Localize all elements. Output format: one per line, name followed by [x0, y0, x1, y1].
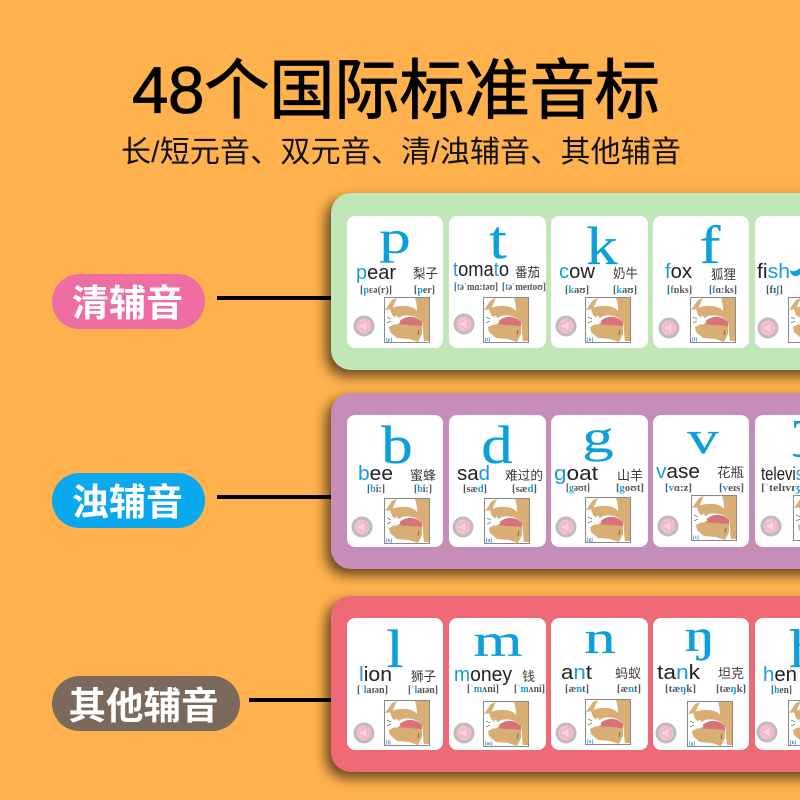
- label: 清辅音: 清辅音: [72, 283, 183, 324]
- card: l: l: [386, 619, 404, 679]
- label: 其他辅音: [52, 676, 240, 731]
- card: l: [ˈlaɪən]: [357, 685, 388, 696]
- card: b: b: [381, 415, 413, 475]
- card: f: 狐狸: [711, 267, 736, 282]
- card: g: 山羊: [617, 468, 643, 483]
- card: d: [d]: [486, 539, 492, 544]
- card: n: n: [584, 613, 616, 663]
- card: d: d: [481, 415, 513, 475]
- label: 浊辅音: [52, 473, 205, 528]
- card: ng: [653, 611, 749, 750]
- card: zh: [755, 398, 800, 547]
- card: t: t: [489, 210, 507, 270]
- card: l: [ˈlaɪən]: [408, 685, 438, 696]
- card: g: goat: [554, 463, 598, 485]
- connector line: voiced: [217, 495, 335, 499]
- card: n: 蚂蚁: [615, 666, 641, 681]
- card: b: [b]: [386, 539, 392, 544]
- card: ng: 坦克: [718, 666, 744, 681]
- card: m: [449, 616, 546, 750]
- card: h: [755, 618, 800, 750]
- card: m: [m]: [485, 742, 493, 747]
- card: t: [449, 210, 546, 348]
- card: f: fox: [665, 261, 692, 283]
- label: 其他辅音: 其他辅音: [68, 685, 218, 727]
- connector line: voiceless: [217, 296, 335, 300]
- card: l: 狮子: [411, 669, 436, 684]
- card: p: p: [379, 213, 411, 263]
- card: h: hen: [763, 664, 797, 686]
- card: ng: ŋ: [684, 611, 716, 661]
- card: b: 蜜蜂: [410, 468, 436, 483]
- card: l: [347, 618, 443, 750]
- card: p: [p]: [386, 338, 392, 343]
- card: ng: [ŋ]: [689, 742, 695, 747]
- card: m: [ˈmʌni]: [514, 684, 545, 695]
- subtitle: 长/短元音、双元音、清/浊辅音、其他辅音: [121, 136, 681, 169]
- card: t: [təˈmeɪtoʊ]: [502, 282, 546, 293]
- card: k: cow: [559, 261, 596, 283]
- card: v: [653, 413, 749, 547]
- card: n: [ænt]: [565, 684, 589, 695]
- panel: voiceless consonants: [326, 193, 800, 376]
- card: m: [ˈmʌni]: [467, 684, 499, 695]
- card: g: g: [582, 412, 614, 462]
- card: f: [f]: [692, 338, 697, 343]
- card: m: m: [474, 616, 522, 666]
- title: 48个国际标准音标: [132, 54, 660, 127]
- panel: other consonants: [326, 596, 800, 778]
- card: f: f: [700, 215, 721, 275]
- card: p: [pɛə(r)]: [360, 285, 392, 296]
- card: g: [goʊt]: [616, 483, 644, 494]
- card: p: [per]: [414, 285, 435, 296]
- card: v: [veɪs]: [719, 483, 744, 494]
- connector line: other: [249, 698, 335, 702]
- card: k: [kaʊ]: [565, 285, 589, 296]
- card: k: [kaʊ]: [613, 285, 637, 296]
- card: n: [ænt]: [617, 684, 641, 695]
- card: f: [fɑ:ks]: [709, 285, 737, 296]
- card: t: 番茄: [515, 265, 540, 280]
- card: t: [t]: [485, 338, 490, 343]
- card: n: [n]: [587, 740, 593, 745]
- label: 浊辅音: 浊辅音: [72, 482, 183, 523]
- card: v: vase: [656, 461, 700, 483]
- card: sh: [fɪʃ]: [766, 285, 783, 296]
- card: sh: [755, 216, 800, 348]
- card: k: [k]: [587, 338, 593, 343]
- card: b: bee: [358, 463, 393, 485]
- card: b: [347, 415, 443, 547]
- card: v: [vɑ:z]: [665, 483, 692, 494]
- card: m: money: [454, 664, 512, 686]
- card: ng: [tæŋk]: [665, 684, 696, 695]
- card: v: [v]: [693, 536, 699, 541]
- card: l: [l]: [386, 741, 391, 746]
- card: v: 花瓶: [717, 465, 744, 480]
- card: ng: [tæŋk]: [716, 684, 746, 695]
- card: ng: tank: [657, 662, 701, 684]
- card: b: [bi:]: [414, 484, 432, 495]
- card: d: sad: [457, 463, 490, 485]
- card: b: [bi:]: [367, 484, 385, 495]
- card: n: [551, 613, 648, 750]
- card: v: v: [687, 413, 719, 463]
- panel: voiced consonants: [326, 393, 800, 575]
- card: d: 难过的: [505, 468, 543, 483]
- card: d: [449, 415, 546, 547]
- card: l: lion: [359, 664, 392, 686]
- card: sh: fish: [757, 261, 790, 283]
- card: h: [h]: [790, 741, 796, 746]
- card: d: [sæd]: [463, 484, 487, 495]
- card: g: [551, 412, 648, 547]
- card: d: [sæd]: [512, 484, 537, 495]
- card: p: [347, 213, 443, 348]
- card: n: ant: [561, 662, 592, 684]
- card: f: [653, 215, 749, 348]
- card: t: tomato: [453, 259, 509, 281]
- card: p: pear: [356, 262, 396, 284]
- card: h: [hen]: [771, 685, 792, 696]
- label: 清辅音: [52, 274, 205, 329]
- card: p: 梨子: [413, 266, 438, 281]
- card: g: [g]: [587, 538, 593, 543]
- card: t: [təˈmɑ:təʊ]: [454, 282, 498, 293]
- card: k: k: [586, 216, 619, 276]
- card: k: 奶牛: [613, 266, 638, 281]
- card: k: [551, 216, 648, 348]
- card: m: 钱: [522, 669, 535, 684]
- card: f: [fɒks]: [667, 285, 692, 296]
- card: g: [gəʊt]: [566, 483, 590, 494]
